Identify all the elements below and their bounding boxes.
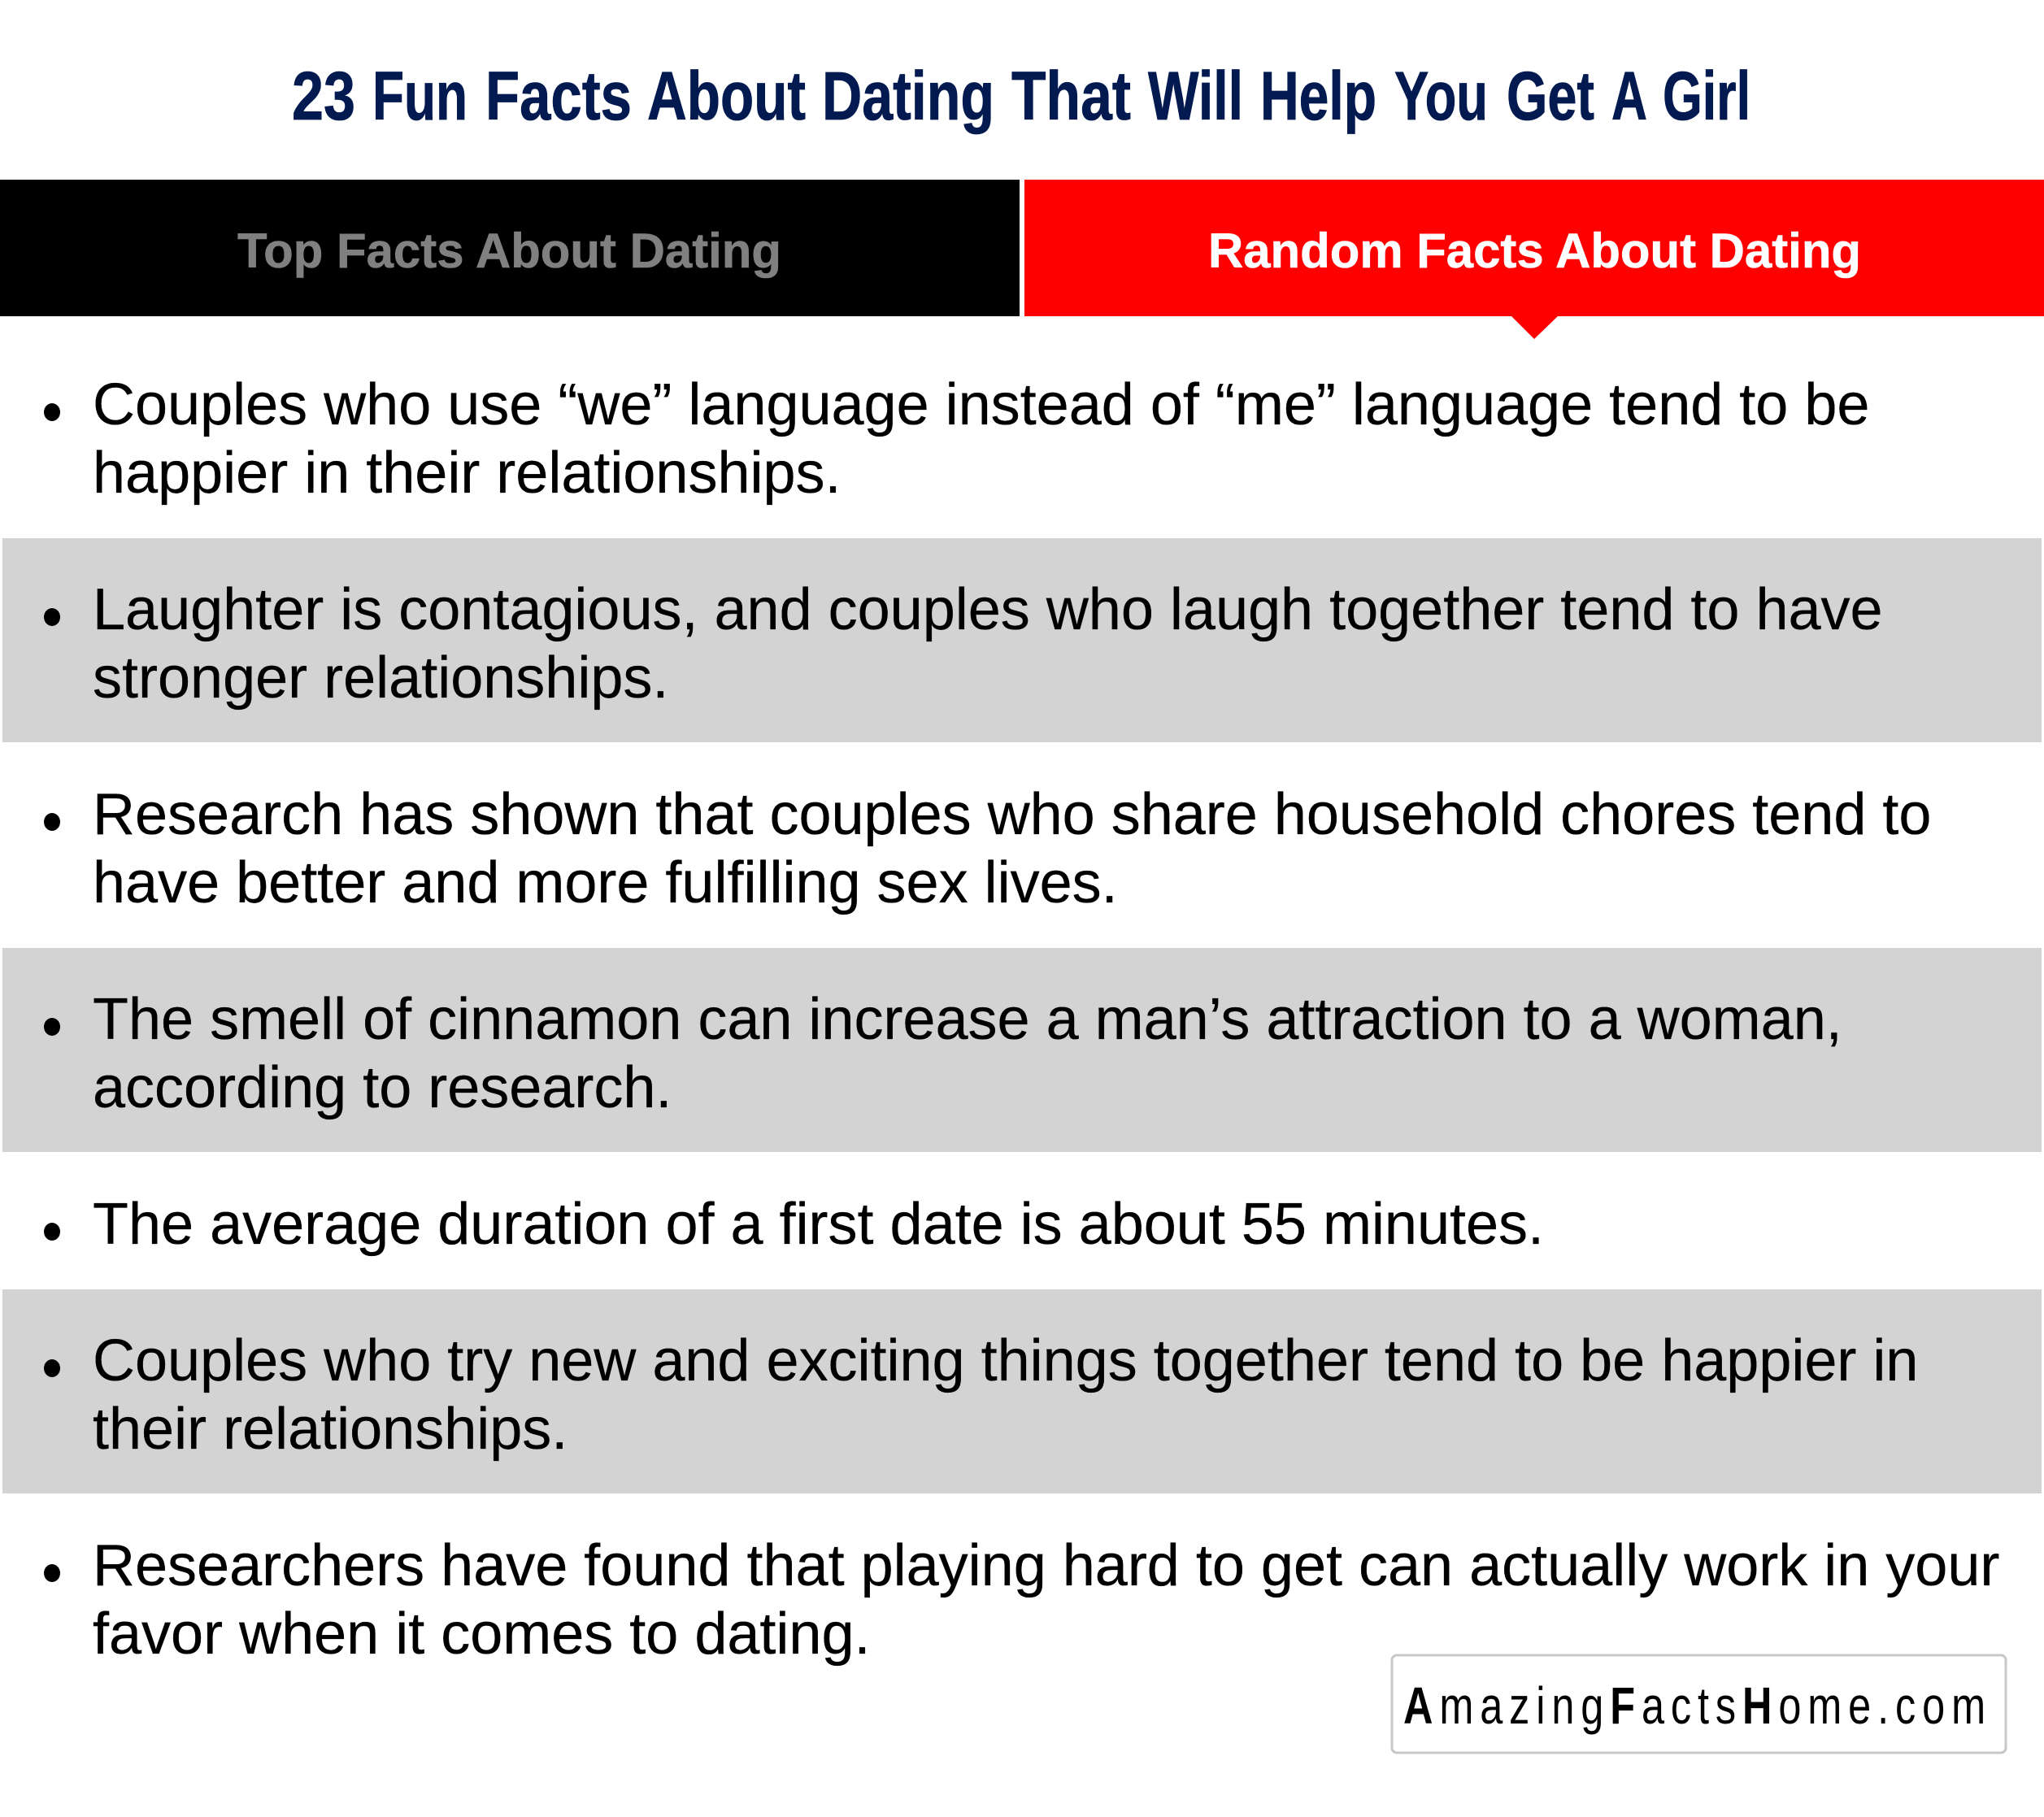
- title: Help: [1260, 58, 1376, 134]
- title: Get: [1507, 58, 1594, 134]
- title: Facts: [485, 58, 632, 134]
- fact 7: [44, 1533, 1999, 1667]
- tab: top facts: [0, 180, 1020, 316]
- fact 1: Couples who use “we” language instead of “me” language tend to be: [93, 372, 1869, 437]
- fact 1: happier in their relationships.: [93, 441, 842, 506]
- title: That: [1011, 58, 1131, 134]
- fact 5: The average duration of a first date is about 55 minutes.: [93, 1192, 1544, 1257]
- logo: AmazingFactsHome.com: AmazingFactsHome.com: [1403, 1676, 1992, 1735]
- logo: AmazingFactsHome.com: [1392, 1655, 2006, 1753]
- tab: random facts: Random Facts About Dating: [1208, 224, 1861, 278]
- title: [292, 58, 1750, 134]
- title: A: [1611, 58, 1647, 134]
- title: You: [1394, 58, 1488, 134]
- fact 2: Laughter is contagious, and couples who laugh together tend to have: [93, 577, 1883, 642]
- title: Dating: [822, 58, 994, 134]
- tab: top facts: Top Facts About Dating: [237, 224, 781, 278]
- fact 6: their relationships.: [93, 1397, 568, 1462]
- fact 2: stronger relationships.: [93, 646, 668, 711]
- tab: random facts: [1024, 180, 2044, 339]
- fact 3: [44, 782, 1931, 915]
- fact 1: [44, 372, 1869, 506]
- fact 4: The smell of cinnamon can increase a man’s attraction to a woman,: [93, 987, 1842, 1052]
- title: Will: [1148, 58, 1243, 134]
- title: About: [647, 58, 806, 134]
- fact 7: favor when it comes to dating.: [93, 1602, 870, 1667]
- title: 23: [292, 58, 355, 134]
- fact 7: Researchers have found that playing hard to get can actually work in your: [93, 1533, 1999, 1598]
- fact 6: [2, 1289, 2042, 1493]
- fact 6: Couples who try new and exciting things together tend to be happier in: [93, 1328, 1918, 1393]
- title: Girl: [1663, 58, 1750, 134]
- fact 2: [2, 538, 2042, 742]
- fact 3: Research has shown that couples who share household chores tend to: [93, 782, 1931, 847]
- title: Fun: [372, 58, 468, 134]
- fact 3: have better and more fulfilling sex lives.: [93, 850, 1118, 915]
- fact 4: [2, 948, 2042, 1152]
- fact 4: according to research.: [93, 1055, 672, 1120]
